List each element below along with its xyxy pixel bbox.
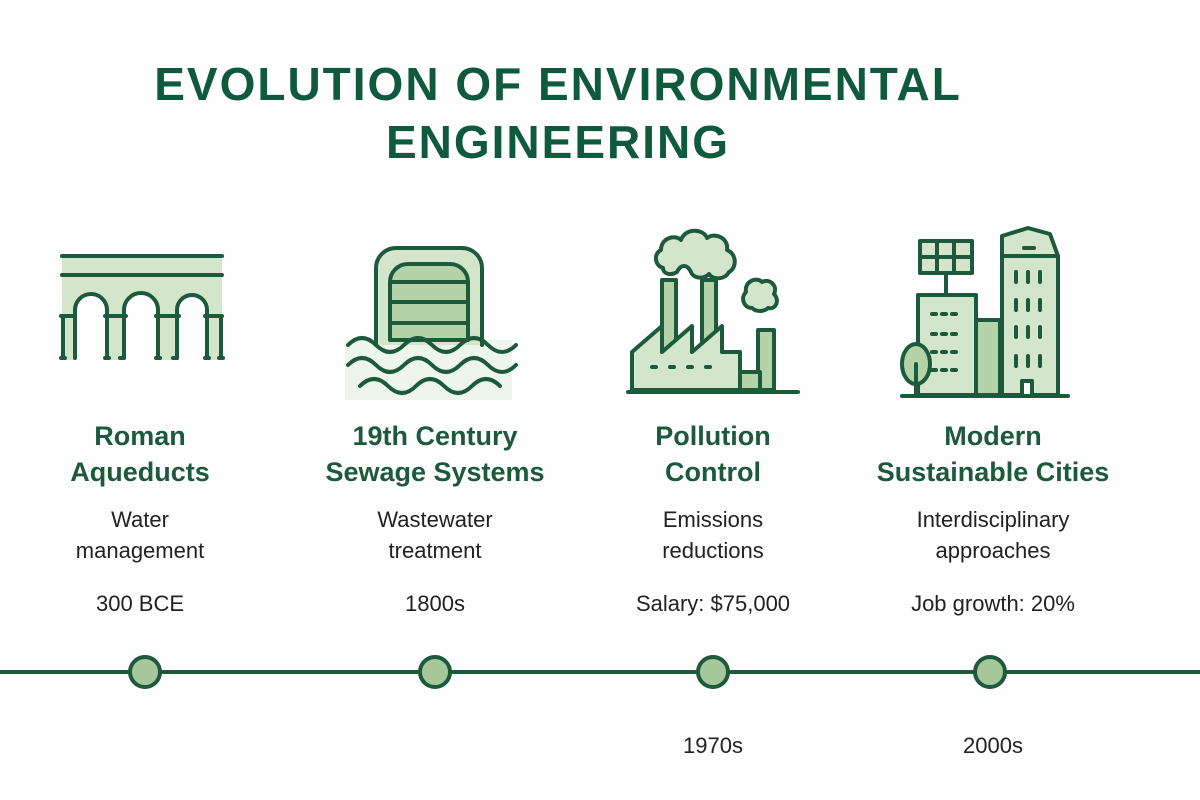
icon: city bbox=[902, 228, 1068, 396]
icon: factory bbox=[628, 231, 798, 392]
label 2000s: 2000s bbox=[963, 733, 1023, 758]
column 3: Pollution Control bbox=[636, 421, 790, 616]
column 2: Sewage: 1800s bbox=[405, 591, 465, 616]
column 1: Roman Aqueducts: management bbox=[76, 538, 204, 563]
title: ENGINEERING bbox=[386, 116, 730, 168]
icon: sewage bbox=[345, 248, 516, 400]
column 4: Modern Cities: Sustainable Cities bbox=[877, 457, 1109, 487]
column 2: Sewage bbox=[325, 421, 545, 616]
icon: aqueduct bbox=[61, 256, 223, 360]
column 3: Pollution Control: reductions bbox=[662, 538, 764, 563]
title: EVOLUTION OF ENVIRONMENTAL bbox=[154, 58, 962, 110]
column 4: Modern Cities: Interdisciplinary bbox=[917, 507, 1069, 532]
column 4: Modern Cities: Job growth: 20% bbox=[911, 591, 1075, 616]
column 1: Roman Aqueducts: Aqueducts bbox=[70, 457, 210, 487]
column 4: Modern Cities bbox=[877, 421, 1109, 616]
column 2: Sewage: 19th Century bbox=[352, 421, 518, 451]
column 3: Pollution Control: Salary: $75,000 bbox=[636, 591, 790, 616]
column 2: Sewage: Wastewater bbox=[377, 507, 493, 532]
column 2: Sewage: Sewage Systems bbox=[325, 457, 545, 487]
title bbox=[154, 58, 962, 168]
column 2: Sewage: treatment bbox=[389, 538, 481, 563]
column 3: Pollution Control: Pollution bbox=[655, 421, 771, 451]
column 1: Roman Aqueducts: 300 BCE bbox=[96, 591, 184, 616]
label 1970s: 1970s bbox=[683, 733, 743, 758]
column 1: Roman Aqueducts: Roman bbox=[94, 421, 186, 451]
column 4: Modern Cities: Modern bbox=[944, 421, 1042, 451]
column 1: Roman Aqueducts bbox=[70, 421, 210, 616]
column 1: Roman Aqueducts: Water bbox=[111, 507, 169, 532]
column 4: Modern Cities: approaches bbox=[936, 538, 1050, 563]
column 3: Pollution Control: Control bbox=[665, 457, 761, 487]
column 3: Pollution Control: Emissions bbox=[663, 507, 763, 532]
timeline bbox=[0, 655, 1200, 689]
